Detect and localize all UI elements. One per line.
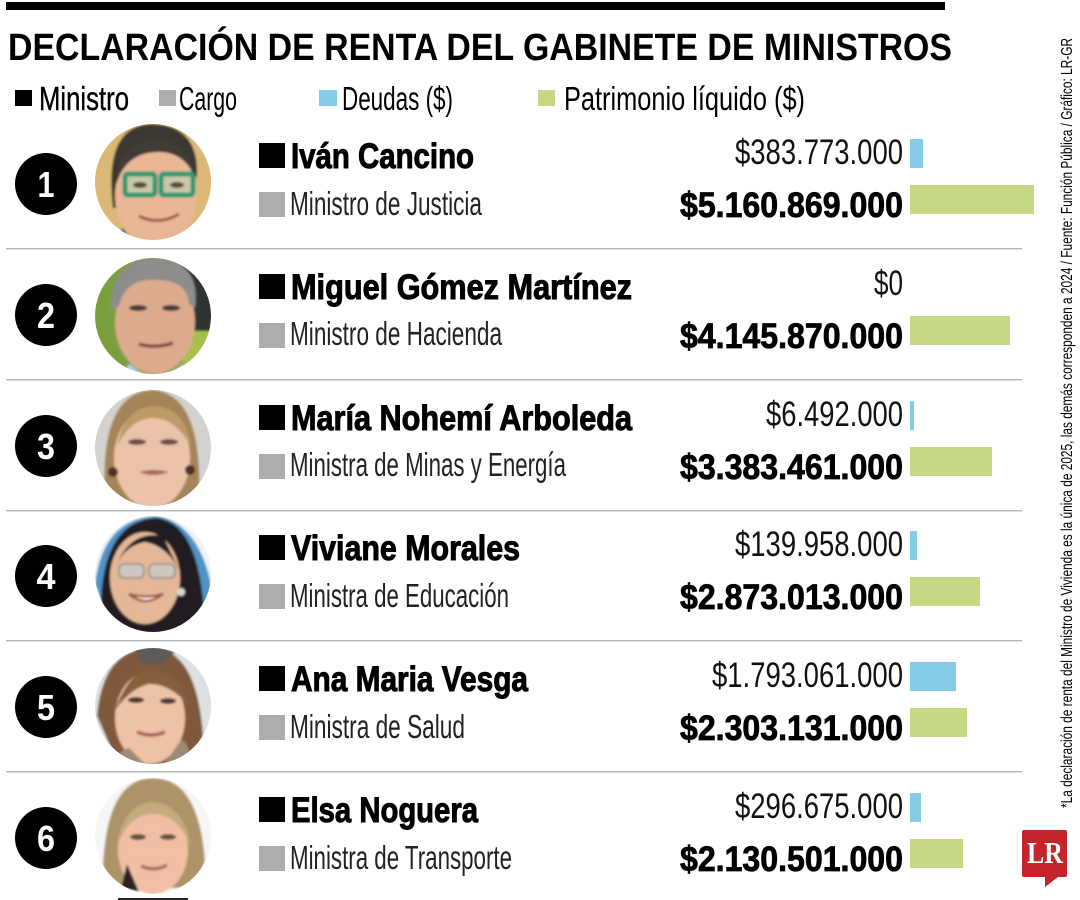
role: Ministra de Transporte (290, 839, 512, 876)
role: Ministro de Hacienda (290, 315, 502, 352)
row 5: Ana Maria Vesga (15, 646, 967, 766)
rank badge 2: 2 (37, 295, 55, 336)
role (259, 577, 509, 614)
photo: Iván Cancino (93, 122, 213, 246)
role (259, 708, 465, 745)
row 6: Elsa Noguera (15, 776, 963, 896)
debt value: $0 (874, 264, 903, 303)
net worth value and bar: $2.130.501.000 (680, 840, 903, 879)
name: Elsa Noguera (291, 791, 478, 830)
legend (15, 80, 805, 117)
photo: Elsa Noguera (93, 776, 213, 896)
name: María Nohemí Arboleda (291, 399, 632, 438)
logo: LR (1022, 830, 1067, 887)
rank badge 6 (15, 807, 77, 869)
role: Ministra de Salud (290, 708, 465, 745)
name: Ana Maria Vesga (291, 660, 528, 699)
debt value and bar: $139.958.000 (735, 525, 903, 564)
row 4: Viviane Morales (15, 514, 980, 634)
logo: LR: LR (1027, 835, 1064, 870)
rank badge 4 (15, 545, 77, 607)
legend: Cargo (179, 80, 237, 117)
net worth value and bar: $2.873.013.000 (680, 578, 903, 617)
net worth value and bar (680, 185, 1034, 225)
net worth value and bar: $2.303.131.000 (680, 709, 903, 748)
row 2: Miguel Gómez Martínez (15, 256, 1010, 376)
debt value and bar: $383.773.000 (735, 133, 903, 172)
legend: Patrimonio líquido ($) (564, 80, 805, 117)
role (259, 839, 512, 876)
debt value and bar: $6.492.000 (766, 395, 903, 434)
name: Miguel Gómez Martínez (291, 268, 632, 307)
rank badge 1: 1 (38, 164, 54, 205)
debt value and bar: $296.675.000 (735, 787, 903, 826)
row 1: Iván Cancino (15, 122, 1034, 246)
net worth value and bar: $3.383.461.000 (680, 448, 903, 487)
top bar (6, 2, 945, 10)
legend: Ministro (39, 80, 129, 117)
role (259, 446, 566, 483)
photo: Miguel Gómez Martínez (93, 256, 213, 376)
role: Ministro de Justicia (290, 185, 482, 222)
rank badge 2 (15, 284, 77, 346)
rank badge 4: 4 (36, 556, 56, 597)
name: Viviane Morales (291, 529, 520, 568)
role: Ministra de Educación (290, 577, 509, 614)
photo: María Nohemí Arboleda (93, 388, 213, 508)
debt value and bar: $1.793.061.000 (712, 656, 903, 695)
net worth value and bar: $5.160.869.000 (680, 186, 903, 225)
rank badge 6: 6 (37, 818, 55, 859)
title: DECLARACIÓN DE RENTA DEL GABINETE DE MINISTROS (8, 25, 952, 69)
photo: Viviane Morales (93, 514, 213, 634)
rank badge 1 (15, 153, 77, 215)
row 3: María Nohemí Arboleda (15, 388, 992, 508)
rank badge 5: 5 (37, 687, 55, 728)
rank badge 3: 3 (37, 426, 55, 467)
rank badge 5 (15, 676, 77, 738)
photo: Ana Maria Vesga (93, 646, 213, 766)
role (259, 315, 502, 352)
net worth value and bar: $4.145.870.000 (680, 317, 903, 356)
legend: Deudas ($) (342, 80, 453, 117)
role: Ministra de Minas y Energía (290, 446, 566, 483)
name: Iván Cancino (291, 137, 474, 176)
rank badge 3 (15, 415, 77, 477)
role (259, 185, 482, 222)
